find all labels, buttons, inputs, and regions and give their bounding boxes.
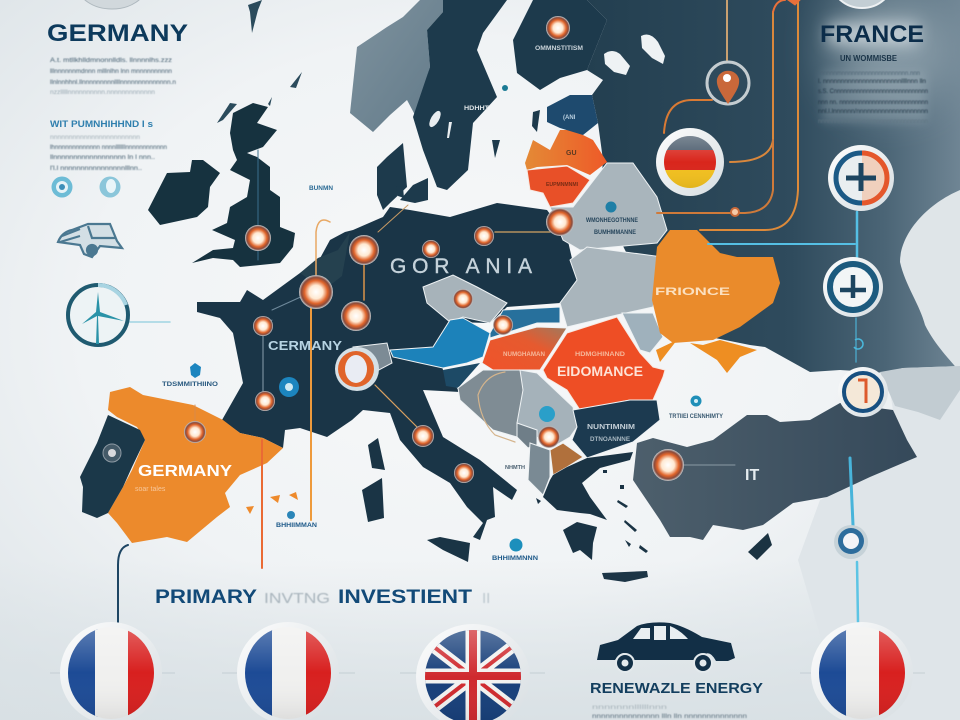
- marker: Frankfurt: [341, 301, 371, 331]
- label: Latvia small: GU: [566, 150, 576, 157]
- hairlines: flag row: [50, 672, 925, 674]
- button: plus two: [823, 257, 883, 317]
- heading part: blurred word: INVTNG: [264, 590, 330, 607]
- region: Turkey: [633, 403, 917, 540]
- paragraph: Germany second: l'l.l nnnnnnnnnnnnnnnnlllnn..: [50, 165, 142, 172]
- marker: Netherlands: [349, 235, 379, 265]
- paragraph: France body: nnnnnnnnnnnnnnnnnnnnnnnnnnnnnnnn: [818, 118, 929, 125]
- marker: UK: [245, 225, 271, 251]
- region: Russian lake Ladoga: [641, 34, 665, 64]
- marker: Belgium: [299, 275, 333, 309]
- text: renewable caption: nnnnnnnnnnnnnnn llln lln nnnnnnnnnnnnnn: [592, 714, 747, 720]
- marker: Portugal: [103, 444, 121, 462]
- marker: blue dot Ionian: [510, 538, 522, 552]
- marker: Poland: [474, 226, 494, 246]
- marker: Warsaw: [546, 208, 574, 236]
- region: Balearics: [246, 492, 298, 514]
- block backing: France body: [822, 72, 926, 122]
- medallion stub: right: [832, 0, 892, 8]
- flag: France three: [811, 622, 913, 720]
- label: Adriatic small: NHMTH: [505, 465, 525, 471]
- region: Benelux: [300, 232, 350, 290]
- label: Spain sub: soar tales: [135, 486, 166, 493]
- region: Swedish lake Vanern: [427, 109, 443, 129]
- label: Finland small: OMMNSTITISM: [535, 46, 583, 52]
- region: Ireland: [148, 160, 220, 225]
- region: Ukraine: [652, 230, 780, 343]
- marker: blue dot Serbia: [539, 406, 555, 422]
- label: Spain GERMANY: GERMANY: [138, 463, 232, 480]
- paragraph: Germany second: llnnnnnnnnnnnnnnnnnn ln l nnn..: [50, 154, 155, 161]
- marker: Nice ring: [335, 347, 379, 391]
- marker: Naples: [454, 463, 474, 483]
- subheading: France: UN WOMMISBE: [840, 54, 898, 63]
- region: Romania: [543, 317, 665, 410]
- heading part: trailing: II: [482, 590, 490, 607]
- marker: blue dot Belarus: [606, 202, 616, 212]
- paragraph: France body: s.S. Cnnnnnnnnnnnnnnnnnnnnnnnnnnnnn: [818, 88, 929, 95]
- paragraph: Germany second: [50, 134, 167, 172]
- region: Cyprus: [748, 533, 772, 560]
- marker: Bordeaux: [255, 391, 275, 411]
- label: Ionian small: BHHIMMNNN: [492, 555, 538, 562]
- subheading: Germany: WIT PUMNHIHHND I s: [50, 119, 153, 130]
- flag: Germany medallion: [656, 128, 724, 196]
- marker: Rome: [412, 425, 434, 447]
- region: Crete: [602, 571, 648, 582]
- marker: blue dot Black Sea: [690, 396, 702, 406]
- region: Spain: [108, 387, 283, 543]
- background bottom shade: [0, 560, 960, 720]
- icon: wind turbine: [68, 285, 128, 345]
- region: Slovenia: [443, 363, 480, 388]
- label: Mediterranean small: BHHIIMMAN: [276, 523, 317, 529]
- marker: Spain: [184, 421, 206, 443]
- heading part: INVESTIENT: INVESTIENT: [338, 587, 472, 608]
- map markers: [103, 16, 702, 552]
- flag: France one: [60, 622, 162, 720]
- paragraph: Germany body: [50, 57, 176, 96]
- region: right light blob: [900, 190, 960, 372]
- label: North Sea small: BUNMN: [309, 186, 333, 192]
- region: south-east light land: [798, 366, 960, 720]
- label: Bulgaria small two: DTNOANNNE: [590, 437, 630, 443]
- label: Lithuania small: EUPMNMNMI: [546, 182, 579, 188]
- marker: blue dot Baltic: [502, 85, 508, 91]
- region: Baltic isles: [492, 110, 540, 158]
- region: Austria: [390, 318, 490, 368]
- region: Caucasus grey: [880, 366, 960, 420]
- icon: cyan knot: [854, 339, 863, 349]
- icon: left bubble: [52, 176, 72, 198]
- paragraph: France body: nnnnnmnnnnnnnnnnnnnnnnnnnn.nnn: [820, 70, 921, 77]
- region: Moldova: [622, 313, 663, 353]
- region: Albania: [528, 443, 550, 495]
- region: Sweden: [413, 0, 507, 190]
- top stubs: [78, 0, 892, 9]
- marker: glow on orange line: [731, 208, 739, 216]
- region: Belarus: [550, 163, 667, 250]
- region: Swedish lake Vattern: [447, 122, 452, 138]
- heading: FRANCE: FRANCE: [820, 21, 924, 48]
- region: Norway: [350, 0, 443, 132]
- icon: car: [597, 622, 735, 672]
- marker: Czechia: [453, 289, 473, 309]
- region: UK: [192, 103, 295, 267]
- paragraph: Germany second: lhnnnnnnnnnnnnn nnnnlllllllnnnnnnnnnnnn: [50, 144, 167, 151]
- marker: Serbia: [538, 426, 560, 448]
- region: Western Ukraine: [560, 247, 663, 327]
- label: Sweden small: HDHHT: [464, 106, 489, 112]
- panel: Germany text: [47, 20, 188, 345]
- paragraph: Germany body: nzzlllllnnnnnnnnnn.nnnnnnnnnnnnn: [50, 89, 155, 96]
- paragraph: Germany body: llnlnnhhnl.llnnnnnnnnnllllnnnnnnnnnnnnnn.n: [50, 79, 176, 86]
- label: Belarus small two: BUMHMMANNE: [594, 230, 636, 236]
- region: Latvia: [525, 130, 607, 175]
- region: Estonia: [547, 95, 598, 135]
- label: Atlantic small: TDSMMITHIINO: [162, 382, 218, 388]
- glow behind France heading: [828, 24, 918, 44]
- paragraph: Germany body: lllnnnnnnmdnnn mlllnlhn lnn mnnnnnnnnnn: [50, 68, 172, 75]
- flag: France two: [237, 622, 339, 720]
- marker: Germany: [422, 240, 440, 258]
- marker: Finland: [546, 16, 570, 40]
- label: Ukraine FRIONCE: FRIONCE: [655, 286, 730, 298]
- flag: United Kingdom: [416, 624, 530, 720]
- region: Denmark: [377, 143, 407, 210]
- panel: France text: [818, 21, 929, 125]
- paragraph: France body: l. nnnnnnnnnnnnnnnnnnnnnnllllnnn lln: [818, 78, 927, 85]
- marker: blue dot France: [279, 377, 299, 397]
- paragraph: Germany second: nnnnnnnnnnnnnnnnnnnnnnnn: [50, 134, 140, 141]
- region: Lithuania: [527, 166, 590, 207]
- region: Crimea and Azov: [656, 340, 757, 373]
- label: France CERMANY: CERMANY: [268, 338, 342, 353]
- button: one: [838, 367, 888, 417]
- heading part: PRIMARY: PRIMARY: [155, 587, 257, 608]
- heading: primary investment: [155, 587, 490, 608]
- region: Greece: [543, 452, 633, 520]
- region: Switzerland: [353, 343, 392, 373]
- marker: Slovakia: [493, 315, 513, 335]
- region: Croatia and Bosnia: [458, 370, 527, 437]
- map labels: [135, 46, 759, 562]
- region: Aegean islands: [536, 470, 648, 553]
- region: Montenegro: [517, 423, 537, 448]
- label: Romania upper: HDMGHINAND: [575, 352, 626, 358]
- icon: right bubble: [100, 176, 120, 198]
- region: Czechia: [423, 275, 507, 323]
- region: Peloponnese: [563, 522, 597, 560]
- region: France, Germany, Poland dark mass: [197, 203, 577, 540]
- marker: Paris: [253, 316, 273, 336]
- region: Slovakia: [490, 307, 560, 338]
- region: Danish islands: [396, 178, 428, 203]
- region: Hungary: [482, 327, 567, 370]
- region: Italian islands: [362, 438, 470, 562]
- label: Black Sea small: TRTIIEI CENNHIMTY: [669, 414, 723, 420]
- button: small bottom: [834, 525, 868, 559]
- paragraph: France body: nnn nn. nnnnnnnnnnnnnnnnnnnnnnnnnnn: [818, 99, 929, 106]
- heading: GERMANY: GERMANY: [47, 20, 188, 47]
- label: Hungary: NUMGHAMAN: [503, 352, 545, 358]
- region: Russian lake Onega: [604, 51, 630, 75]
- heading: renewable energy: RENEWAZLE ENERGY: [590, 680, 763, 697]
- region: North Macedonia: [550, 443, 583, 475]
- marker: blue dot Balearic: [287, 511, 295, 519]
- label: Bulgaria small: NUNTIMNIM: [587, 424, 635, 431]
- region: Bulgaria: [572, 400, 660, 458]
- label: Belarus small: WMONHEGOTHNNE: [586, 218, 638, 224]
- marker: Istanbul: [652, 449, 684, 481]
- paragraph: France body: nnl.l.lnnnnnn/nnnnnnnnnnnnnnnnnnnn: [818, 108, 929, 115]
- button: pin medallion: [707, 62, 749, 104]
- region: Portugal: [80, 415, 145, 518]
- text: renewable caption: [592, 705, 747, 720]
- label: Romania: EIDOMANCE: [557, 363, 643, 379]
- region: Russia dark panel: [587, 0, 960, 373]
- paragraph: France body: [818, 70, 929, 125]
- region: Serbia: [517, 370, 577, 447]
- label: Estonia small: (ANI: [563, 115, 576, 121]
- region: Hebrides and small isles: [217, 0, 302, 123]
- icon: car sketch: [58, 224, 122, 257]
- label: GOR ANIA: GOR ANIA: [390, 255, 532, 278]
- label: Turkey IT: IT: [745, 467, 759, 484]
- glow: top right panel: [830, 0, 950, 105]
- paragraph: Germany body: A.t. mtllkhlldmnonnlldls. llnnnnlhs.zzz: [50, 57, 172, 64]
- connector lines: [118, 0, 858, 622]
- region: Finland: [513, 0, 607, 90]
- button: plus one: [828, 145, 894, 211]
- text: renewable caption: nnnnnnnllllllnnn: [592, 705, 667, 711]
- medallion stub: left: [78, 0, 146, 9]
- marker: blue shield: [190, 363, 201, 378]
